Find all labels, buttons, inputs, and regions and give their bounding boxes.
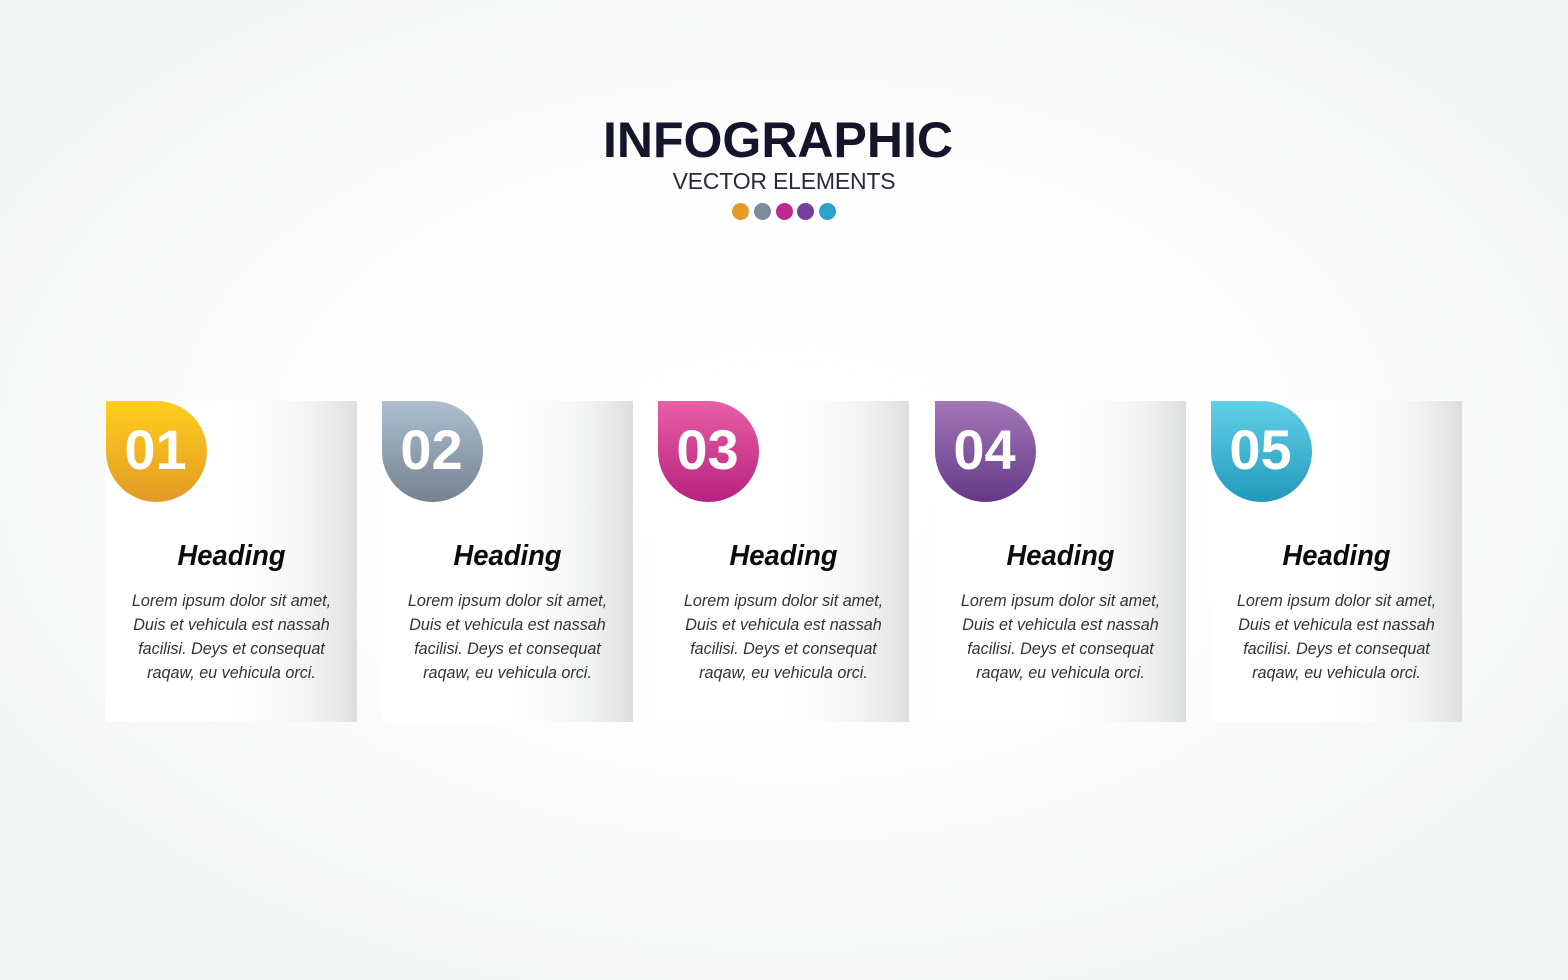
- text 03: facilisi. Deys et consequat: [690, 640, 877, 658]
- heading 02: Heading: [453, 540, 562, 572]
- text 01: Lorem ipsum dolor sit amet,: [132, 592, 331, 610]
- text 04: Duis et vehicula est nassah: [962, 616, 1159, 634]
- badge 03: 03: [676, 418, 739, 481]
- text 04: [961, 592, 1160, 682]
- text 05: facilisi. Deys et consequat: [1243, 640, 1430, 658]
- heading 01: Heading: [177, 540, 286, 572]
- text 03: raqaw, eu vehicula orci.: [699, 664, 868, 682]
- badge 02: 02: [400, 418, 463, 481]
- text 01: facilisi. Deys et consequat: [138, 640, 325, 658]
- text 05: raqaw, eu vehicula orci.: [1252, 664, 1421, 682]
- heading 03: Heading: [729, 540, 838, 572]
- badge 01: 01: [124, 418, 187, 481]
- text 01: raqaw, eu vehicula orci.: [147, 664, 316, 682]
- text 03: [684, 592, 883, 682]
- badge 05: [1211, 401, 1312, 502]
- panel: step 01: [106, 401, 357, 722]
- text 05: Duis et vehicula est nassah: [1238, 616, 1435, 634]
- badge 04: [935, 401, 1036, 502]
- text 02: Duis et vehicula est nassah: [409, 616, 606, 634]
- text 05: [1237, 592, 1436, 682]
- panel: step 03: [658, 401, 909, 722]
- text 02: facilisi. Deys et consequat: [414, 640, 601, 658]
- text 01: Duis et vehicula est nassah: [133, 616, 330, 634]
- text 01: [132, 592, 331, 682]
- panel: step 05: [1211, 401, 1462, 722]
- text 03: Lorem ipsum dolor sit amet,: [684, 592, 883, 610]
- text 04: Lorem ipsum dolor sit amet,: [961, 592, 1160, 610]
- text 04: facilisi. Deys et consequat: [967, 640, 1154, 658]
- panel: step 02: [382, 401, 633, 722]
- subtitle: VECTOR ELEMENTS: [673, 168, 895, 194]
- heading 04: Heading: [1006, 540, 1115, 572]
- badge 02: [382, 401, 483, 502]
- title: INFOGRAPHIC: [603, 112, 953, 168]
- badge 04: 04: [953, 418, 1016, 481]
- badge 03: [658, 401, 759, 502]
- text 02: raqaw, eu vehicula orci.: [423, 664, 592, 682]
- badge 01: [106, 401, 207, 502]
- text 05: Lorem ipsum dolor sit amet,: [1237, 592, 1436, 610]
- heading 05: Heading: [1282, 540, 1391, 572]
- text 02: [408, 592, 607, 682]
- text 02: Lorem ipsum dolor sit amet,: [408, 592, 607, 610]
- text 03: Duis et vehicula est nassah: [685, 616, 882, 634]
- text 04: raqaw, eu vehicula orci.: [976, 664, 1145, 682]
- colour dots: [732, 203, 836, 220]
- panel: step 04: [935, 401, 1186, 722]
- badge 05: 05: [1229, 418, 1292, 481]
